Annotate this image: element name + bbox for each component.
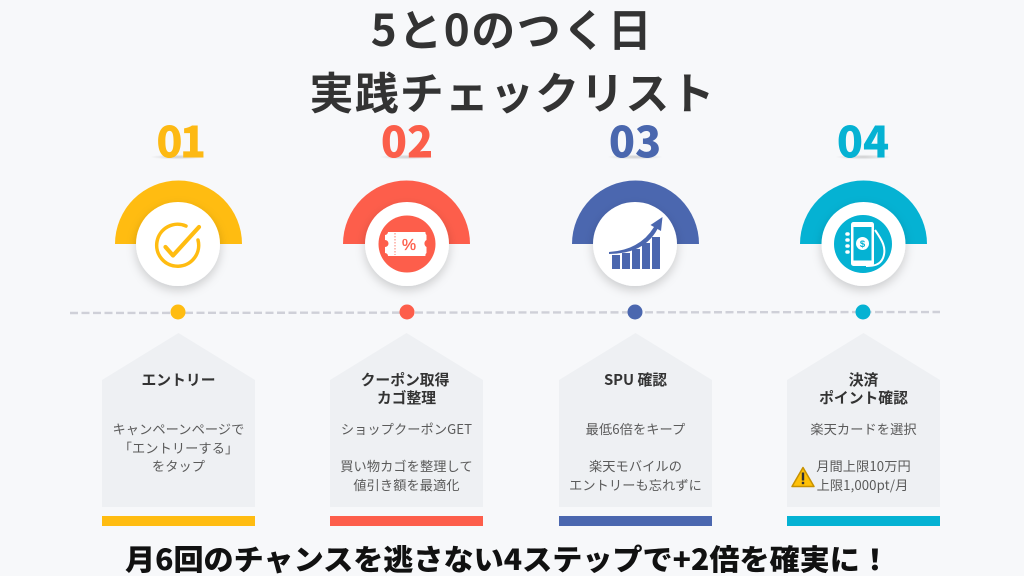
colour bar 02 (330, 516, 483, 526)
timeline dot 03 (628, 304, 642, 320)
card 04: 上限1,000pt/月 (817, 475, 908, 494)
card 03: SPU 確認 (604, 369, 667, 390)
title (310, 0, 714, 122)
card 03: 最低6倍をキープ (586, 419, 685, 438)
title: 実践チェックリスト (310, 58, 714, 122)
step number 01 (150, 108, 206, 170)
timeline dot 02 (400, 304, 414, 320)
icon: phone payment in hand: $ (860, 239, 866, 250)
step number 01: 1 (180, 108, 206, 170)
card 01 (102, 333, 255, 507)
card 02 (330, 333, 483, 507)
icon: phone payment in hand (822, 202, 906, 286)
icon: check in circle (136, 202, 220, 286)
card 01: キャンペーンページで (113, 419, 244, 438)
card 03: 楽天モバイルの (589, 456, 682, 475)
step number 03: 03 (609, 108, 661, 170)
icon: growth chart (593, 202, 677, 286)
card 02: クーポン取得 (361, 369, 450, 390)
card 02: 買い物カゴを整理して (340, 456, 473, 475)
card 01: をタップ (152, 456, 205, 475)
icon: warning triangle (792, 468, 814, 486)
card 02: ショップクーポンGET (341, 419, 472, 438)
card 04: 楽天カードを選択 (810, 419, 917, 438)
card 04 (787, 333, 940, 507)
arc 02 (343, 180, 470, 244)
panel: step 04 (787, 108, 940, 526)
card 04: ポイント確認 (819, 387, 908, 408)
card 04: 決済 (849, 369, 878, 390)
timeline dashed line (70, 312, 940, 313)
icon: coupon ticket: % (402, 237, 416, 254)
colour bar 04 (787, 516, 940, 526)
panel: step 03 (559, 108, 712, 526)
arc 04 (800, 180, 927, 244)
step number 01: 0 (156, 108, 183, 170)
card 01: 「エントリーする」 (119, 438, 238, 457)
icon: coupon ticket (365, 202, 449, 286)
card 02: カゴ整理 (377, 387, 436, 408)
card 04: 月間上限10万円 (816, 456, 911, 475)
arc 03 (572, 180, 699, 244)
panel: step 02 (330, 108, 483, 526)
colour bar 01 (102, 516, 255, 526)
colour bar 03 (559, 516, 712, 526)
card 03: エントリーも忘れずに (569, 475, 702, 494)
card 01: エントリー (142, 369, 216, 390)
card 03 (559, 333, 712, 507)
step number 02: 02 (381, 108, 433, 170)
timeline dot 01 (170, 304, 186, 320)
step number 04: 04 (837, 108, 889, 170)
panel: step 01 (102, 108, 255, 526)
card 02: 値引き額を最適化 (353, 475, 460, 494)
timeline dot 04 (856, 304, 870, 320)
arc 01 (115, 180, 242, 244)
